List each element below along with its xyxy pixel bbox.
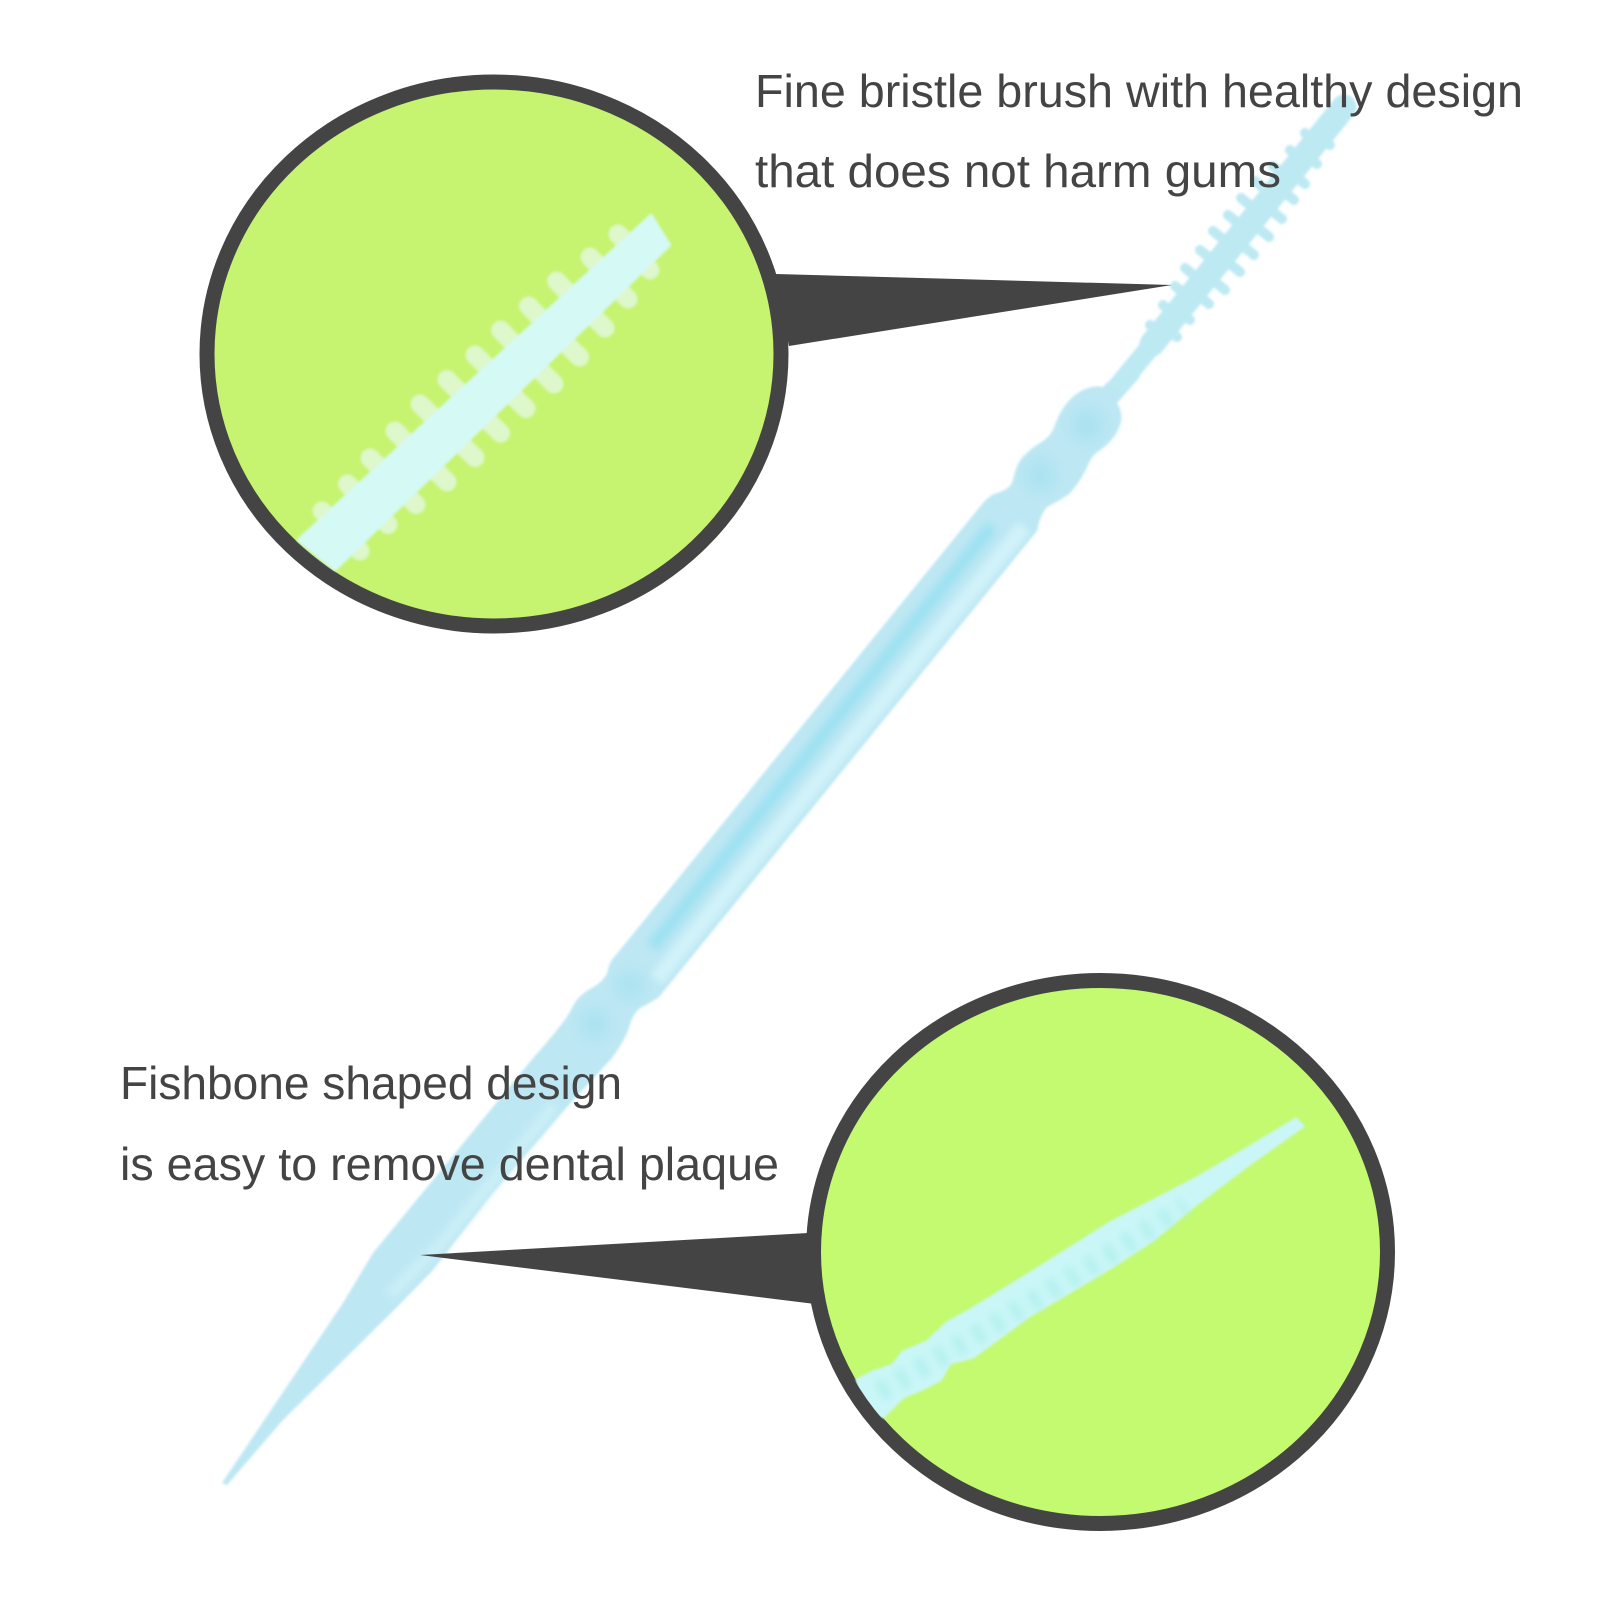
callout pointer: bottom xyxy=(420,1233,815,1304)
bristle teeth xyxy=(1150,133,1330,337)
tip ridge shading xyxy=(880,1206,1185,1392)
bristle stem upper xyxy=(1152,107,1344,344)
tapered end lighter edge xyxy=(390,1105,555,1295)
tip outline xyxy=(857,1119,1303,1417)
lens circle xyxy=(814,980,1388,1524)
magnifier: fine bristle brush xyxy=(207,82,781,626)
infographic canvas xyxy=(123,74,1520,1531)
text: fishbone design caption xyxy=(120,1057,779,1190)
magnified fishbone tip xyxy=(857,1119,1303,1417)
magnified teeth xyxy=(322,234,650,551)
bulge shading xyxy=(581,408,1104,1040)
handle lighter edge xyxy=(656,527,1024,980)
toothpick product xyxy=(222,107,1344,1485)
text: fine bristle brush caption xyxy=(755,65,1523,197)
toothpick body outline xyxy=(222,370,1140,1485)
handle centre stripe xyxy=(652,526,992,947)
caption line 2: is easy to remove dental plaque xyxy=(120,1138,779,1190)
caption line 2: that does not harm gums xyxy=(755,145,1281,197)
magnified bristle brush xyxy=(299,216,669,569)
caption line 1: Fine bristle brush with healthy design xyxy=(755,65,1523,117)
lens circle xyxy=(207,82,781,626)
bristle stem lower xyxy=(1115,329,1165,390)
magnified core xyxy=(299,216,669,569)
callout pointer: top xyxy=(776,274,1172,346)
magnifier: fishbone tip xyxy=(814,980,1388,1524)
caption line 1: Fishbone shaped design xyxy=(120,1057,622,1109)
